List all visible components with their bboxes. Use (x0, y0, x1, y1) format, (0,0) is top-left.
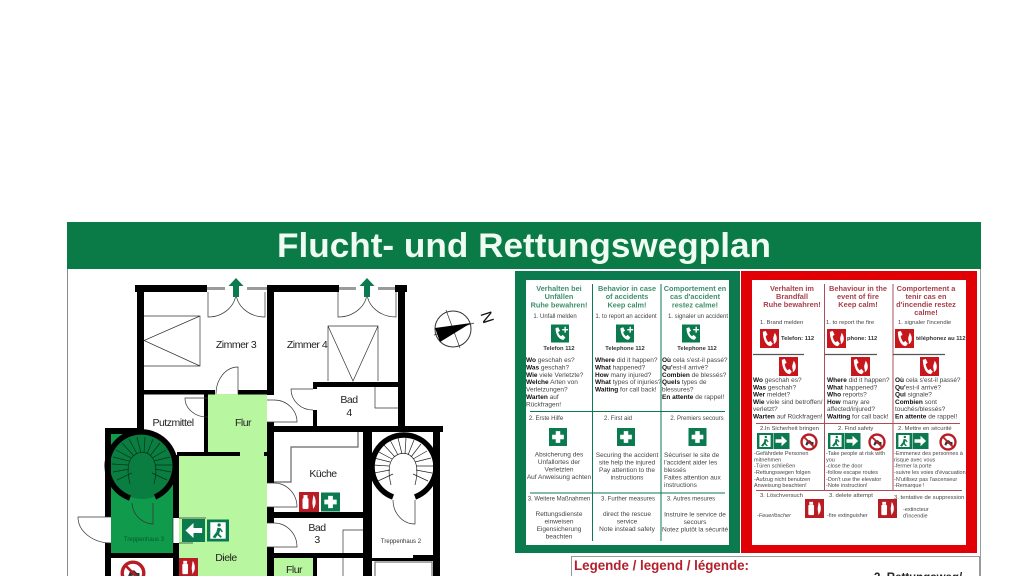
step 2 first aid: Auf Anweisung achten (527, 474, 592, 481)
step 1 questions: Où cela s'est-il passé? (895, 377, 961, 384)
stair enclosure arcs (107, 432, 436, 498)
step 3 further measures: 3. Autres mesures (667, 496, 715, 502)
icon: running man exit (207, 520, 229, 542)
step 1 questions (526, 357, 728, 408)
step 2 first aid: instructions (664, 482, 698, 489)
step 2 first aid: l'accident aider les (664, 460, 718, 466)
icon: hall extinguisher (179, 558, 198, 576)
step 2 first aid: Pay attention to the (599, 467, 655, 474)
step 1 report fire: 1. Brand melden (760, 320, 803, 326)
exit arrows on facade (228, 278, 374, 297)
column headings: event of fire (837, 292, 879, 301)
furniture (144, 316, 432, 576)
column headings: Comportement en (664, 284, 726, 293)
icon: kitchen first aid (321, 492, 340, 512)
step 2 first aid: 2. First aid (604, 416, 632, 422)
step 1 questions: Was geschah? (753, 384, 797, 392)
step 1 questions: Qui signale? (895, 392, 932, 398)
step 2 first aid (527, 416, 724, 489)
white stairwell 2 (372, 432, 434, 558)
step 1 report: 1. signaler un accident (668, 314, 728, 320)
room labels: Flur (235, 417, 252, 429)
step 1 questions: Where did it happen? (595, 357, 658, 364)
step 1 questions: What types of injuries? (595, 379, 662, 386)
step 1 report fire: téléphonez au 112 (916, 336, 966, 342)
step 3 extinguish: -extincteur (903, 507, 929, 513)
room labels: Flur (286, 564, 303, 576)
step 3 further measures: einweisen (545, 518, 574, 526)
step 2 safety: you (826, 458, 835, 464)
step 1 report: Telephone 112 (677, 346, 717, 352)
step 1 questions: Wo geschah es? (753, 377, 802, 384)
step 3 further measures: direct the rescue (603, 511, 651, 518)
column headings: restez calme! (672, 300, 718, 310)
step 2 first aid: Absicherung des (535, 452, 584, 458)
step 1 report fire: Telefon: 112 (781, 336, 814, 342)
room labels: 4 (346, 407, 352, 419)
column headings: Brandfall (776, 292, 808, 301)
column headings: Keep calm! (838, 300, 878, 309)
column headings: cas d'accident (670, 292, 721, 301)
panel: legend (572, 556, 980, 576)
column headings (531, 284, 726, 310)
step 2 safety: 2. Mettre en sécurité (898, 426, 952, 432)
column headings: Ruhe bewahren! (763, 300, 821, 309)
step 3 extinguish: -Feuerlöscher (757, 513, 792, 519)
icon: prohibition sign (122, 562, 144, 576)
step 1 questions: Wer meldet? (753, 392, 790, 398)
step 3 further measures (528, 496, 728, 540)
walls (105, 285, 443, 576)
step 1 questions: Où cela s'est-il passé? (662, 357, 728, 364)
step 2 safety: Anweisung beachten! (754, 483, 807, 489)
panel: fire behaviour (red) (741, 271, 977, 553)
step 2 safety: -Gefährdete Personen (754, 451, 808, 457)
step 2 safety: -N'utilisez pas l'ascenseur (894, 477, 957, 483)
step 2 first aid: instructions (611, 474, 644, 482)
step 2 safety: risque avec vous (894, 458, 936, 464)
step 3 further measures: beachten (546, 534, 573, 540)
step 2 first aid: Verletzten (545, 466, 574, 474)
step 2 safety: 2. Find safety (838, 426, 873, 432)
step 1 questions: Was geschah? (526, 364, 570, 372)
column headings: Ruhe bewahren! (531, 300, 587, 310)
room labels: Bad (340, 394, 358, 406)
column headings: Unfällen (545, 292, 573, 301)
step 1 questions: What happened? (827, 384, 878, 392)
page frame (67, 269, 981, 576)
step 1 questions: blessures? (662, 386, 694, 394)
panel: accident behaviour (green) (515, 271, 740, 553)
step 1 report: Telephone 112 (605, 346, 645, 352)
column headings: of accidents (606, 292, 648, 301)
room labels: Putzmittel (152, 417, 194, 429)
step 2 safety: -fermer la porte (894, 464, 932, 470)
step 2 first aid: site help the injured (599, 460, 656, 466)
green stairwell 3 (109, 433, 175, 553)
room labels: 3 (314, 534, 320, 546)
column headings: Behavior in case (598, 284, 656, 293)
icon: kitchen extinguisher (299, 492, 319, 512)
step 1 questions: What happened? (595, 364, 646, 372)
step 1 questions: verletzt? (753, 406, 778, 413)
column headings: calme! (914, 308, 938, 317)
step 2 first aid: blessés (664, 467, 687, 474)
step 2 safety: 2.In Sicherheit bringen (760, 426, 819, 432)
step 2 safety: -Türen schließen (754, 464, 795, 470)
step 3 extinguish: 3. Löschversuch (760, 493, 803, 499)
column headings: Verhalten bei (536, 284, 582, 293)
step 1 questions: touchés/blessés? (895, 406, 946, 413)
step 2 safety: -Take people at risk with (826, 451, 885, 457)
room labels: Treppenhaus 2 (381, 539, 422, 545)
step 1 questions: Welche Arten von (526, 379, 578, 386)
title banner: Flucht- und Rettungswegplan (277, 227, 771, 265)
step 1 questions: Waiting for call back! (827, 414, 889, 420)
room labels: Zimmer 3 (216, 339, 257, 351)
step 1 report fire: 1. to report the fire (826, 320, 875, 326)
room labels: Bad (308, 522, 326, 534)
step 1 report (533, 314, 728, 352)
step 3 further measures: Rettungsdienste (536, 511, 583, 518)
step 3 extinguish: d'incendie (903, 514, 928, 520)
step 2 safety (754, 426, 966, 489)
step 3 further measures: service (617, 518, 638, 526)
step 1 questions: Wie viele sind betroffen/ (753, 399, 823, 406)
step 3 further measures: 3. Further measures (601, 496, 655, 502)
step 3 extinguish: 3. delete attempt (829, 493, 873, 499)
step 3 further measures: Note instead safety (599, 526, 656, 533)
compass (434, 309, 496, 348)
step 3 further measures: Instruire le service de (664, 512, 726, 518)
step 1 questions: Warten auf Rückfragen! (753, 414, 823, 420)
step 2 safety: -follow escape routes (826, 470, 878, 476)
step 1 questions: Verletzungen? (526, 386, 568, 394)
step 2 safety: -close the door (826, 464, 863, 470)
step 1 report fire: phone: 112 (847, 336, 877, 342)
step 2 safety: -suivre les voies d'évacuation (894, 470, 966, 476)
step 1 questions: How many injured? (595, 372, 652, 379)
step 1 questions: Rückfragen! (526, 402, 561, 408)
step 1 questions: How many are (827, 399, 870, 406)
step 2 first aid: Securing the accident (596, 452, 658, 459)
title banner (67, 222, 981, 269)
step 2 safety: -Aufzug nicht benutzen (754, 477, 810, 483)
step 1 report fire (760, 320, 966, 376)
column headings: Verhalten im (770, 284, 814, 293)
column headings: tenir cas en (905, 292, 947, 301)
column headings: d'incendie restez (896, 300, 956, 309)
step 1 questions: Where did it happen? (827, 377, 890, 384)
step 2 first aid: 2. Erste Hilfe (529, 416, 564, 422)
step 1 questions: Qu'est-il arrivé? (895, 384, 941, 392)
step 1 questions: En attente de rappel! (895, 414, 957, 420)
room labels: Küche (309, 468, 337, 480)
room labels: Treppenhaus 3 (124, 537, 165, 543)
step 1 questions: Wie viele Verletzte? (526, 372, 584, 379)
legend heading: Legende / legend / légende: (574, 557, 749, 573)
escape route floor areas (179, 394, 313, 576)
step 3 further measures: Notez plutôt la sécurité (662, 526, 728, 534)
step 2 safety: -Note instruction! (826, 483, 868, 489)
step 2 first aid: Faites attention aux (664, 474, 721, 482)
step 1 questions: Wo geschah es? (526, 357, 575, 364)
step 3 extinguish (757, 493, 964, 520)
panel dividers (756, 284, 962, 490)
panel dividers (530, 284, 725, 541)
step 1 report: 1. to report an accident (595, 314, 657, 320)
doors (78, 292, 415, 547)
step 1 questions: Combien sont (895, 399, 937, 406)
compass: N (476, 309, 496, 326)
room labels: Zimmer 4 (287, 339, 328, 351)
column headings (763, 284, 956, 317)
step 2 first aid: Sécuriser le site de (664, 452, 720, 459)
step 2 safety: -Remarque ! (894, 483, 925, 489)
step 1 questions: Combien de blessés? (662, 372, 727, 379)
step 2 first aid: 2. Premiers secours (670, 416, 724, 422)
step 1 questions: Quels types de (662, 379, 707, 386)
step 2 safety: mitnehmen (754, 458, 781, 464)
step 2 first aid: Unfallortes der (538, 459, 581, 466)
step 1 questions (753, 377, 961, 420)
step 2 safety: -Emmenez des personnes à (894, 451, 964, 457)
step 1 questions: Who reports? (827, 392, 867, 398)
step 3 further measures: 3. Weitere Maßnahmen (528, 496, 590, 502)
step 1 questions: affected/injured? (827, 406, 875, 413)
step 1 questions: Waiting for call back! (595, 386, 657, 394)
step 3 extinguish: -fire extinguisher (827, 513, 868, 519)
step 2 safety: -Rettungswegen folgen (754, 470, 811, 476)
column headings: Behaviour in the (829, 284, 887, 293)
step 1 questions: En attente de rappel! (662, 394, 724, 401)
column headings: Keep calm! (608, 300, 646, 310)
step 3 further measures: secours (684, 519, 707, 526)
step 1 questions: Qu'est-il arrivé? (662, 364, 708, 372)
step 3 further measures: Eigensicherung (537, 526, 582, 533)
icon: exit arrow (182, 519, 205, 542)
step 1 questions: Warten auf (526, 394, 559, 401)
step 1 report fire: 1. signaler l'incendie (898, 320, 952, 326)
room labels: Diele (215, 552, 237, 564)
step 1 report: 1. Unfall melden (533, 314, 577, 320)
window glazing (207, 287, 395, 290)
step 1 report: Telefon 112 (543, 346, 575, 352)
column headings: Comportement a (897, 284, 956, 293)
floor plan (78, 278, 443, 576)
step 3 extinguish: 3. tentative de suppression (894, 495, 964, 501)
step 2 safety: -Don't use the elevator (826, 477, 881, 483)
room labels (124, 339, 422, 576)
